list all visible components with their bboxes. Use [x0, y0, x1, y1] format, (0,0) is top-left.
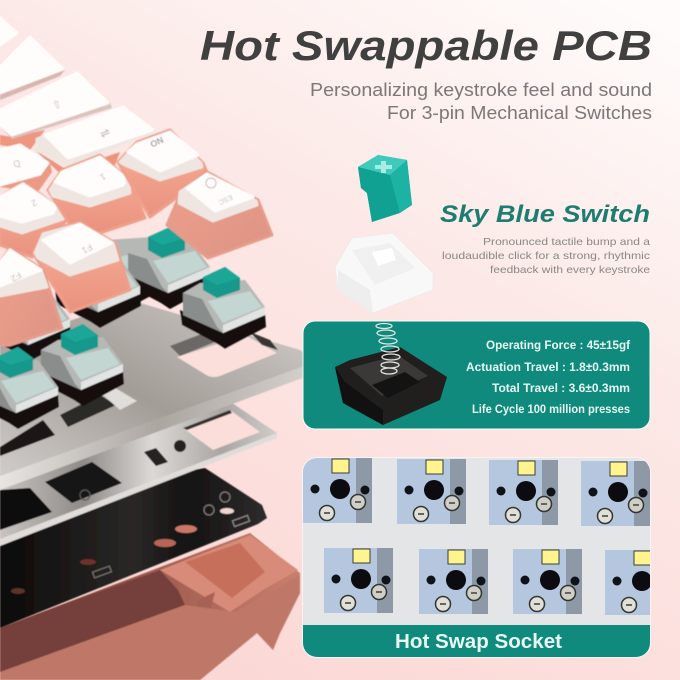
- keycap: number 1: [48, 155, 145, 233]
- bottom case: [0, 533, 300, 680]
- keycap: long top: [0, 37, 65, 100]
- keycap: number 1: 1: [98, 171, 108, 182]
- icon: clear switch housing: [335, 233, 433, 313]
- title: Hot Swappable PCB: [200, 22, 652, 69]
- subtitle: For 3-pin Mechanical Switches: [387, 102, 652, 123]
- plate cutout: [183, 410, 260, 450]
- keycap: NO: NO: [149, 135, 165, 149]
- exploded keyboard illustration: [0, 18, 316, 680]
- middle plate: [0, 403, 277, 546]
- panel: switch specs: [303, 321, 650, 429]
- spec list: [466, 340, 630, 416]
- keycap: number 2: [0, 182, 65, 257]
- keycap: F1: [33, 222, 130, 312]
- keycap: ESC: [167, 172, 272, 258]
- keycap: tab: [35, 107, 154, 178]
- keycap: F1: F1: [80, 242, 94, 256]
- keycap: tab: ⇌: [98, 125, 112, 141]
- keycap: Q row left: [0, 143, 52, 192]
- keycap: corner: [0, 18, 17, 45]
- switch row: [0, 227, 266, 429]
- keycap: number 2: 2: [30, 197, 39, 208]
- keycap: F2: F2: [9, 270, 23, 284]
- socket grid: [303, 458, 674, 615]
- spec list: Actuation Travel : 1.8±0.3mm: [466, 362, 630, 374]
- switch description: loudaudible click for a strong, rhythmic: [442, 250, 650, 262]
- keycap: shift: ⇧: [51, 98, 64, 113]
- keycap: F2: [0, 248, 62, 345]
- socket label: Hot Swap Socket: [395, 631, 562, 653]
- top plate: [0, 300, 316, 490]
- heading: Sky Blue Switch: Sky Blue Switch: [440, 201, 650, 228]
- switch description: [442, 236, 650, 276]
- black plate: [0, 468, 267, 628]
- icon: teal switch stem: [358, 155, 412, 222]
- keycap: NO: [118, 130, 208, 217]
- switch description: Pronounced tactile bump and a: [483, 236, 650, 248]
- keycaps: [0, 18, 272, 345]
- keycap: ESC: ESC: [217, 193, 233, 205]
- icon: switch base with spring: [335, 324, 447, 425]
- spec list: Total Travel : 3.6±0.3mm: [492, 383, 630, 395]
- subtitle: Personalizing keystroke feel and sound: [310, 79, 652, 100]
- keycap: Q row left: Q: [11, 158, 22, 170]
- spec list: Operating Force : 45±15gf: [486, 340, 630, 352]
- panel: hot swap socket: [302, 457, 674, 658]
- spec list: Life Cycle 100 million presses: [472, 404, 630, 416]
- plate window: [177, 335, 277, 377]
- subtitle: [310, 79, 652, 123]
- switch description: feedback with every keystroke: [490, 264, 650, 276]
- keycap: shift: [0, 73, 112, 150]
